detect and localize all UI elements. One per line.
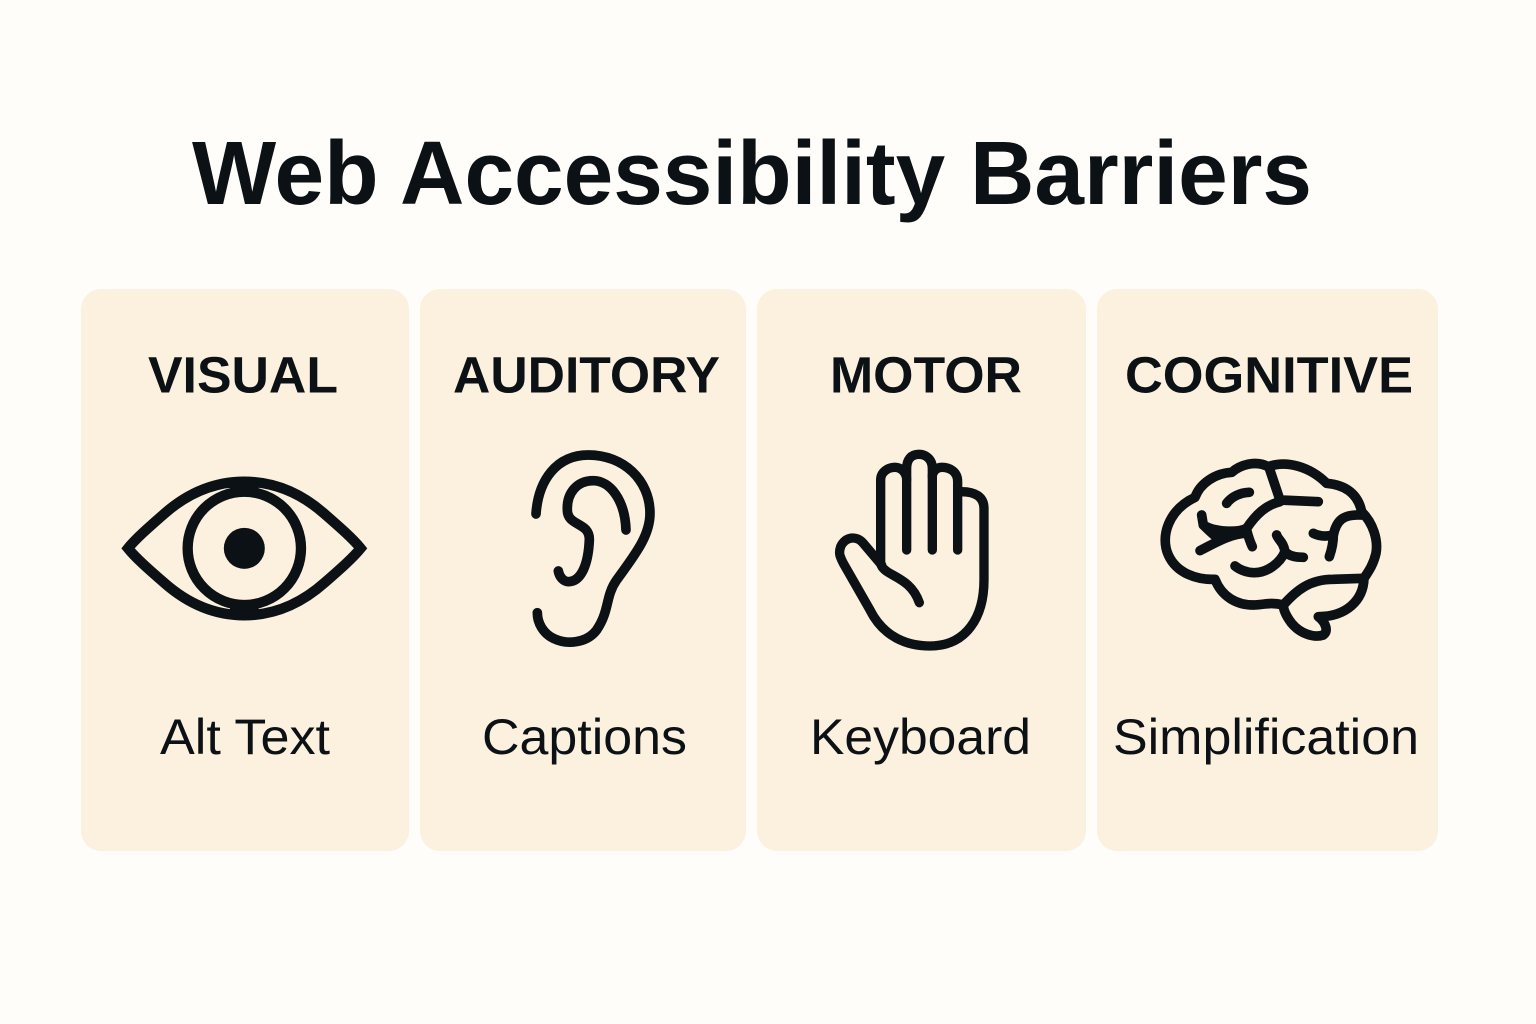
label: simplification: Simplification bbox=[1113, 709, 1419, 765]
icon: hand bbox=[840, 454, 984, 646]
panel: motor bbox=[757, 289, 1086, 851]
label: keyboard: Keyboard bbox=[810, 709, 1031, 765]
heading: auditory: AUDITORY bbox=[453, 346, 720, 404]
heading: motor: MOTOR bbox=[830, 346, 1022, 404]
icon: ear bbox=[536, 455, 650, 642]
heading: visual: VISUAL bbox=[148, 346, 338, 404]
icon: brain bbox=[1165, 464, 1377, 636]
title: Web Accessibility Barriers bbox=[192, 124, 1312, 224]
heading: cognitive: COGNITIVE bbox=[1125, 346, 1413, 404]
panel: auditory bbox=[420, 289, 746, 851]
panel: cognitive bbox=[1097, 289, 1438, 851]
label: alt text: Alt Text bbox=[160, 709, 330, 765]
label: captions: Captions bbox=[482, 709, 687, 765]
panel: visual bbox=[81, 289, 409, 851]
icon: eye bbox=[128, 482, 361, 615]
